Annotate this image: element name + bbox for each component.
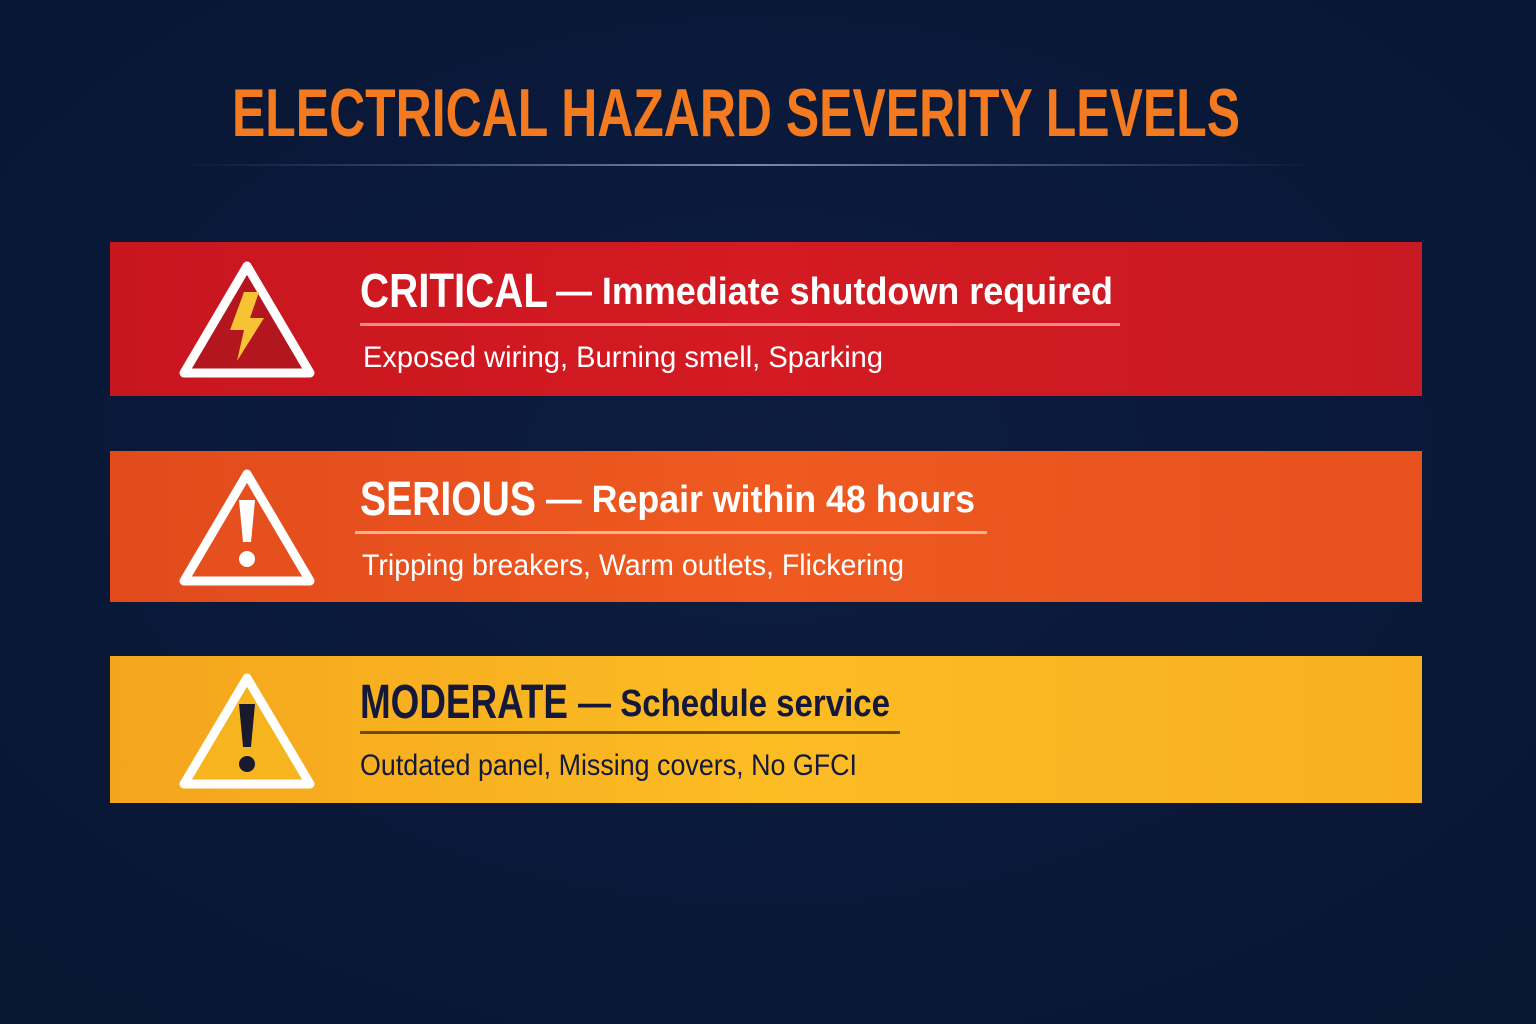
icon: exclamation triangle dark <box>184 678 310 784</box>
panel: critical <box>110 242 1422 396</box>
panel: moderate: — Schedule service <box>578 683 890 725</box>
panel: serious: — Repair within 48 hours <box>546 479 975 521</box>
icon: exclamation triangle <box>184 474 310 581</box>
heading: critical: CRITICAL <box>360 265 548 318</box>
heading: moderate: MODERATE <box>360 676 568 729</box>
text: serious symptoms: Tripping breakers, Warm outlets, Flickering <box>362 549 904 582</box>
heading: serious: SERIOUS <box>360 473 536 526</box>
panel: moderate <box>110 656 1422 803</box>
panel: critical: — Immediate shutdown required <box>556 271 1113 313</box>
panel: serious <box>110 451 1422 602</box>
icon: lightning warning triangle <box>184 266 310 373</box>
text: moderate symptoms: Outdated panel, Missing covers, No GFCI <box>360 749 857 782</box>
text: critical symptoms: Exposed wiring, Burning smell, Sparking <box>363 341 883 374</box>
